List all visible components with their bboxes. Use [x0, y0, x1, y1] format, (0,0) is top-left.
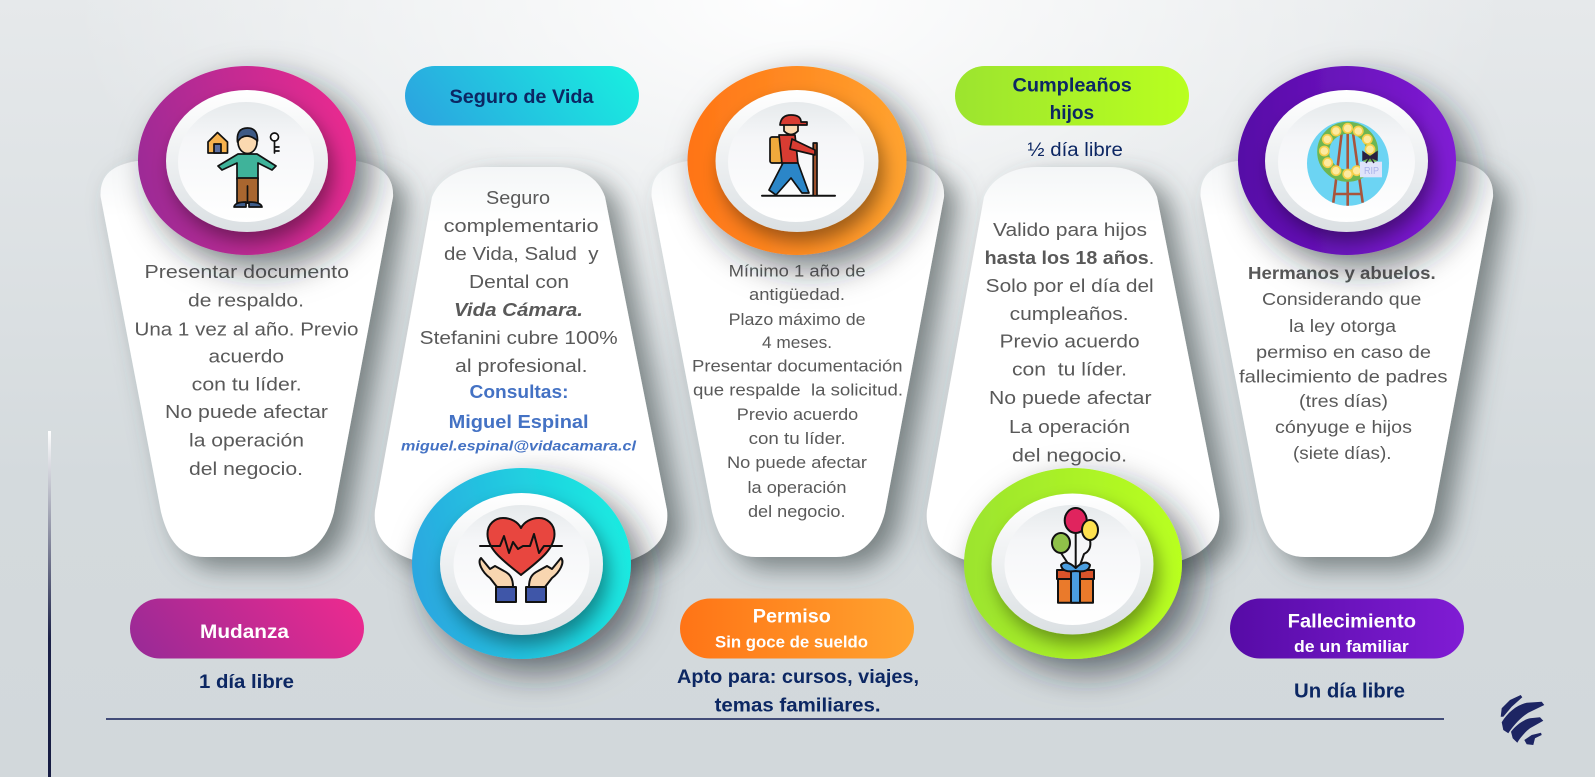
- text: Seguro de Vida details: Consultas:: [470, 381, 568, 402]
- text: Permiso requirements: Previo acuerdo: [737, 406, 858, 424]
- text: Permiso requirements: del negocio.: [748, 503, 846, 521]
- text: Seguro de Vida details: Vida Cámara.: [454, 299, 583, 320]
- panel: Seguro de Vida: [375, 167, 667, 563]
- text: Fallecimiento details: la ley otorga: [1289, 316, 1396, 336]
- text: Fallecimiento details: permiso en caso de: [1256, 342, 1431, 362]
- card: Seguro de Vida: [375, 167, 667, 563]
- card: Mudanza: [100, 161, 393, 557]
- panel: Mudanza: [100, 161, 393, 557]
- text: Seguro de Vida details: Miguel Espinal: [449, 411, 589, 432]
- badge circle: Seguro de Vida: [412, 468, 631, 659]
- text: Fallecimiento details: Considerando que: [1262, 289, 1421, 309]
- text: Permiso requirements: con tu líder.: [749, 430, 846, 448]
- text: Seguro de Vida details: de Vida, Salud y: [444, 243, 599, 264]
- text: Fallecimiento details: [1239, 263, 1448, 463]
- pill: Permiso: [680, 598, 914, 658]
- text: Permiso requirements: que respalde la solicitud.: [693, 382, 903, 400]
- text: Cumpleaños details: con tu líder.: [1012, 358, 1127, 380]
- pill: Permiso: Permiso: [753, 606, 831, 628]
- note: apto para: Apto para: cursos, viajes,: [677, 666, 919, 688]
- icon: heart held by hands: [480, 518, 562, 602]
- pill: Seguro de Vida: [405, 66, 639, 126]
- text: Seguro de Vida details: Stefanini cubre 100%: [420, 327, 618, 348]
- text: Seguro de Vida details: Dental con: [469, 271, 569, 292]
- text: Permiso requirements: Presentar documentación: [692, 358, 902, 376]
- text: Mudanza requirements: [134, 261, 358, 479]
- text: Seguro de Vida details: al profesional.: [455, 355, 588, 376]
- text: Fallecimiento details: (tres días): [1299, 391, 1388, 411]
- text: Mudanza requirements: No puede afectar: [165, 401, 328, 422]
- bottom divider line: [106, 718, 1444, 720]
- pill: Cumpleaños hijos: hijos: [1050, 102, 1094, 124]
- text: Cumpleaños details: [985, 219, 1154, 466]
- text: Fallecimiento details: cónyuge e hijos: [1275, 417, 1412, 437]
- text: Mudanza requirements: Una 1 vez al año. Previo: [134, 319, 358, 340]
- note: un dia libre: Un día libre: [1294, 681, 1405, 703]
- card: Permiso: [651, 161, 944, 557]
- card: Cumpleaños hijos: [927, 167, 1219, 563]
- text: Permiso requirements: [692, 263, 903, 521]
- icon: hiker: [762, 115, 835, 196]
- text: Permiso requirements: Mínimo 1 año de: [729, 263, 866, 281]
- note: apto para: [677, 666, 919, 717]
- text: Mudanza requirements: con tu líder.: [192, 374, 302, 395]
- pill: Fallecimiento: de un familiar: [1294, 637, 1409, 656]
- text: Cumpleaños details: La operación: [1009, 416, 1130, 437]
- card: Fallecimiento: [1200, 161, 1493, 557]
- text: Fallecimiento details: (siete días).: [1293, 443, 1392, 463]
- text: Cumpleaños details: Solo por el día del: [986, 275, 1154, 296]
- icon: funeral wreath: RIP: [1364, 166, 1379, 177]
- pill: Seguro de Vida: Seguro de Vida: [450, 86, 595, 108]
- badge circle: Fallecimiento: [1238, 66, 1456, 255]
- text: Cumpleaños details: No puede afectar: [989, 387, 1152, 408]
- text: Cumpleaños details: cumpleaños.: [1010, 303, 1129, 324]
- text: Fallecimiento details: fallecimiento de padres: [1239, 366, 1448, 386]
- panel: Permiso: [651, 161, 944, 557]
- icon: person with house and key: [208, 128, 279, 207]
- text: Cumpleaños details: Valido para hijos: [993, 219, 1147, 240]
- pill: Cumpleaños hijos: [955, 66, 1189, 126]
- pill: Fallecimiento: Fallecimiento: [1288, 610, 1416, 632]
- text: Seguro de Vida details: Seguro: [486, 187, 550, 208]
- text: Cumpleaños details: del negocio.: [1012, 445, 1127, 466]
- vertical accent bar: [48, 431, 51, 777]
- text: Permiso requirements: No puede afectar: [727, 454, 868, 472]
- text: Cumpleaños details: hasta los 18 años .: [985, 247, 1154, 268]
- text: Permiso requirements: Plazo máximo de: [729, 311, 866, 329]
- text: Fallecimiento details: Hermanos y abuelos.: [1248, 263, 1436, 283]
- icon: gift with balloons: [1052, 508, 1098, 603]
- text: Seguro de Vida details: miguel.espinal@vidacamara.cl: [401, 438, 637, 454]
- pill: Permiso: Sin goce de sueldo: [715, 633, 868, 652]
- icon: funeral wreath: [1307, 121, 1389, 206]
- badge circle: Cumpleaños: [964, 468, 1182, 659]
- badge circle: Mudanza: [138, 66, 356, 255]
- text: Seguro de Vida details: [401, 187, 637, 454]
- text: Permiso requirements: 4 meses.: [762, 334, 832, 352]
- text: Mudanza requirements: acuerdo: [208, 346, 284, 367]
- text: Mudanza requirements: del negocio.: [189, 458, 303, 479]
- text: Seguro de Vida details: complementario: [444, 215, 599, 236]
- pill: Mudanza: [130, 598, 364, 658]
- badge circle: Permiso: [688, 66, 906, 255]
- text: Permiso requirements: antigüedad.: [749, 286, 845, 304]
- note: apto para: temas familiares.: [715, 695, 881, 717]
- text: Cumpleaños details: Previo acuerdo: [1000, 331, 1140, 352]
- text: Mudanza requirements: de respaldo.: [188, 290, 304, 311]
- text: Mudanza requirements: Presentar documento: [144, 261, 349, 282]
- panel: Cumpleaños hijos: [927, 167, 1219, 563]
- note: medio dia libre: ½ día libre: [1028, 140, 1123, 161]
- logo: striped globe: [1501, 695, 1544, 745]
- pill: Fallecimiento: [1230, 598, 1464, 658]
- text: Permiso requirements: la operación: [748, 479, 846, 497]
- pill: Mudanza: Mudanza: [200, 621, 290, 643]
- text: Mudanza requirements: la operación: [189, 430, 304, 451]
- pill: Cumpleaños hijos: Cumpleaños: [1012, 75, 1132, 97]
- panel: Fallecimiento: [1200, 161, 1493, 557]
- note: 1 dia libre: 1 día libre: [199, 671, 294, 693]
